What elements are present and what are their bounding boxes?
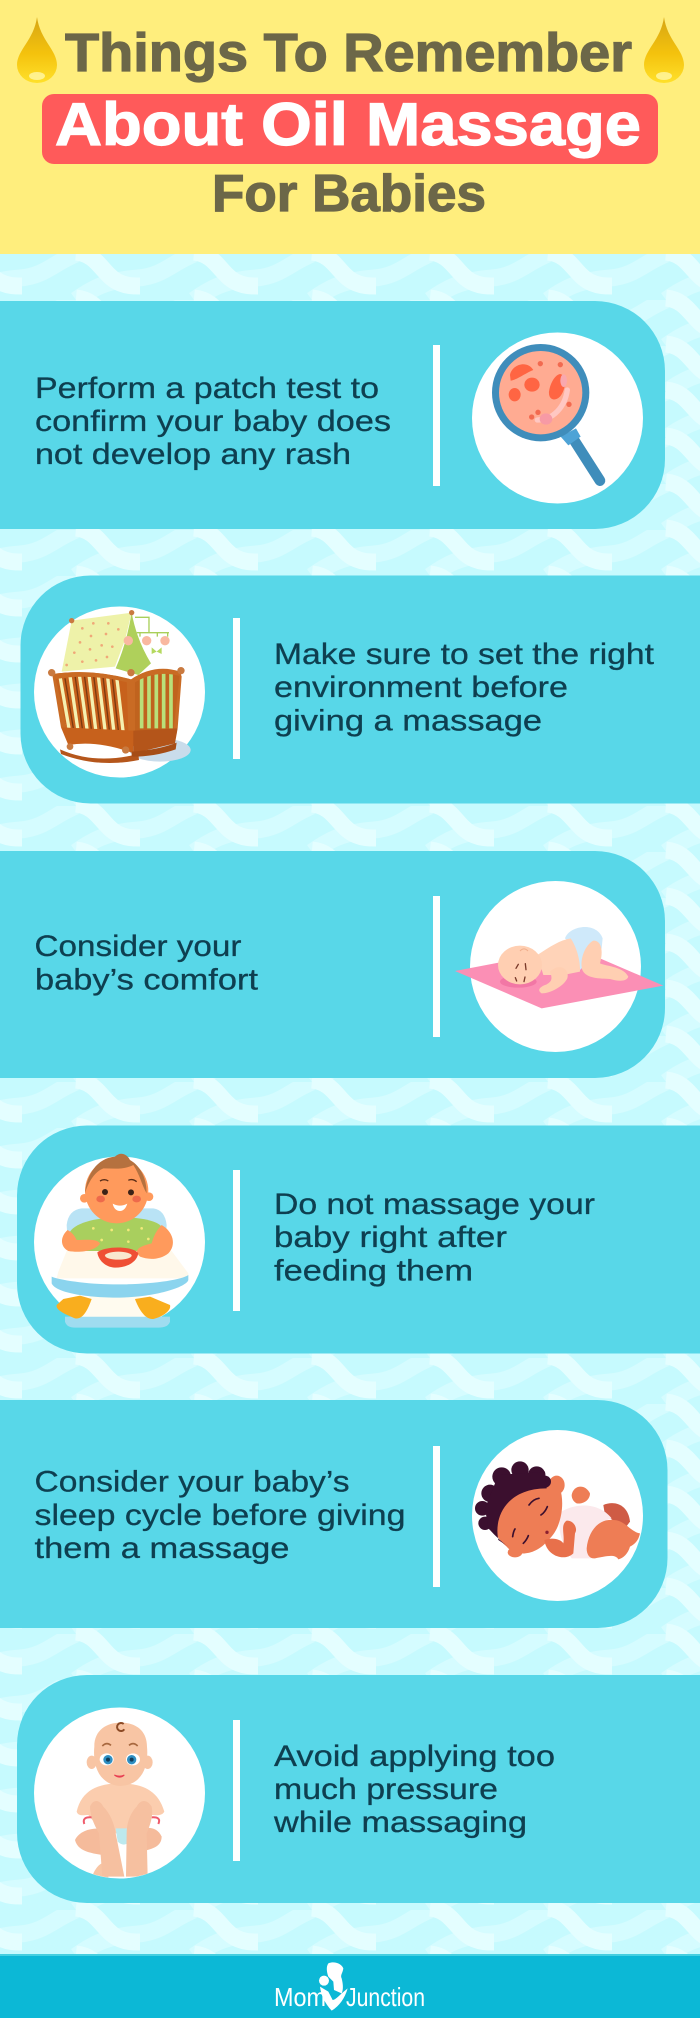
text: sleep cycle: sleep cycle before giving: [34, 1499, 406, 1532]
icon: right oil drop: [644, 17, 684, 83]
logo: MomJunction: [274, 1962, 425, 2012]
text: feeding: baby right after: [274, 1221, 507, 1254]
text: patch test: Perform a patch test to: [35, 372, 379, 405]
text: patch test: [35, 372, 391, 471]
logo: MomJunction: Mom: [274, 1982, 326, 2012]
icon: crib: [34, 606, 205, 778]
divider: [433, 345, 440, 486]
text: environment: Make sure to set the right: [274, 638, 655, 671]
logo: MomJunction: Junction: [346, 1982, 425, 2012]
title line 3: For Babies: [212, 165, 486, 223]
text: sleep cycle: them a massage: [34, 1532, 290, 1565]
icon: left oil drop: [17, 17, 57, 83]
text: pressure: much pressure: [274, 1773, 498, 1806]
title line 2: About Oil Massage: [55, 91, 641, 158]
text: environment: giving a massage: [274, 704, 542, 738]
text: comfort: baby’s comfort: [35, 964, 259, 996]
text: feeding: [274, 1188, 595, 1288]
icon: baby lying on mat: [455, 881, 663, 1052]
divider: [433, 896, 440, 1037]
text: pressure: Avoid applying too: [274, 1740, 555, 1773]
text: patch test: not develop any rash: [35, 438, 351, 471]
divider: [433, 1446, 440, 1587]
text: patch test: confirm your baby does: [35, 405, 391, 438]
icon: magnifier over rash: [472, 332, 643, 504]
header: [0, 0, 700, 254]
text: pressure: while massaging: [273, 1806, 527, 1839]
text: sleep cycle: [34, 1466, 406, 1565]
divider: [233, 1170, 240, 1311]
text: pressure: [273, 1740, 555, 1839]
text: comfort: [34, 930, 259, 996]
text: feeding: feeding them: [274, 1254, 473, 1288]
panel: pressure: [17, 1675, 700, 1903]
panel: comfort: [0, 851, 665, 1078]
text: environment: [274, 638, 655, 738]
icon: baby in high chair: [34, 1154, 205, 1328]
text: comfort: Consider your: [34, 930, 242, 963]
panel: environment: [20, 576, 700, 804]
title line 1: Things To Remember: [65, 23, 632, 83]
title highlight box: [42, 91, 658, 164]
icon: massaging baby: [34, 1708, 205, 1880]
divider: [233, 1720, 240, 1861]
icon: sleeping baby: [472, 1430, 643, 1601]
panel: feeding: [17, 1126, 700, 1354]
divider: [233, 618, 240, 759]
footer: [0, 1954, 700, 2018]
text: environment: environment before: [274, 671, 568, 704]
panel: patch test: [0, 301, 665, 529]
text: feeding: Do not massage your: [274, 1188, 595, 1221]
panel: sleep cycle: [0, 1400, 668, 1628]
text: sleep cycle: Consider your baby’s: [34, 1466, 350, 1498]
logo figure: [319, 1962, 348, 2011]
